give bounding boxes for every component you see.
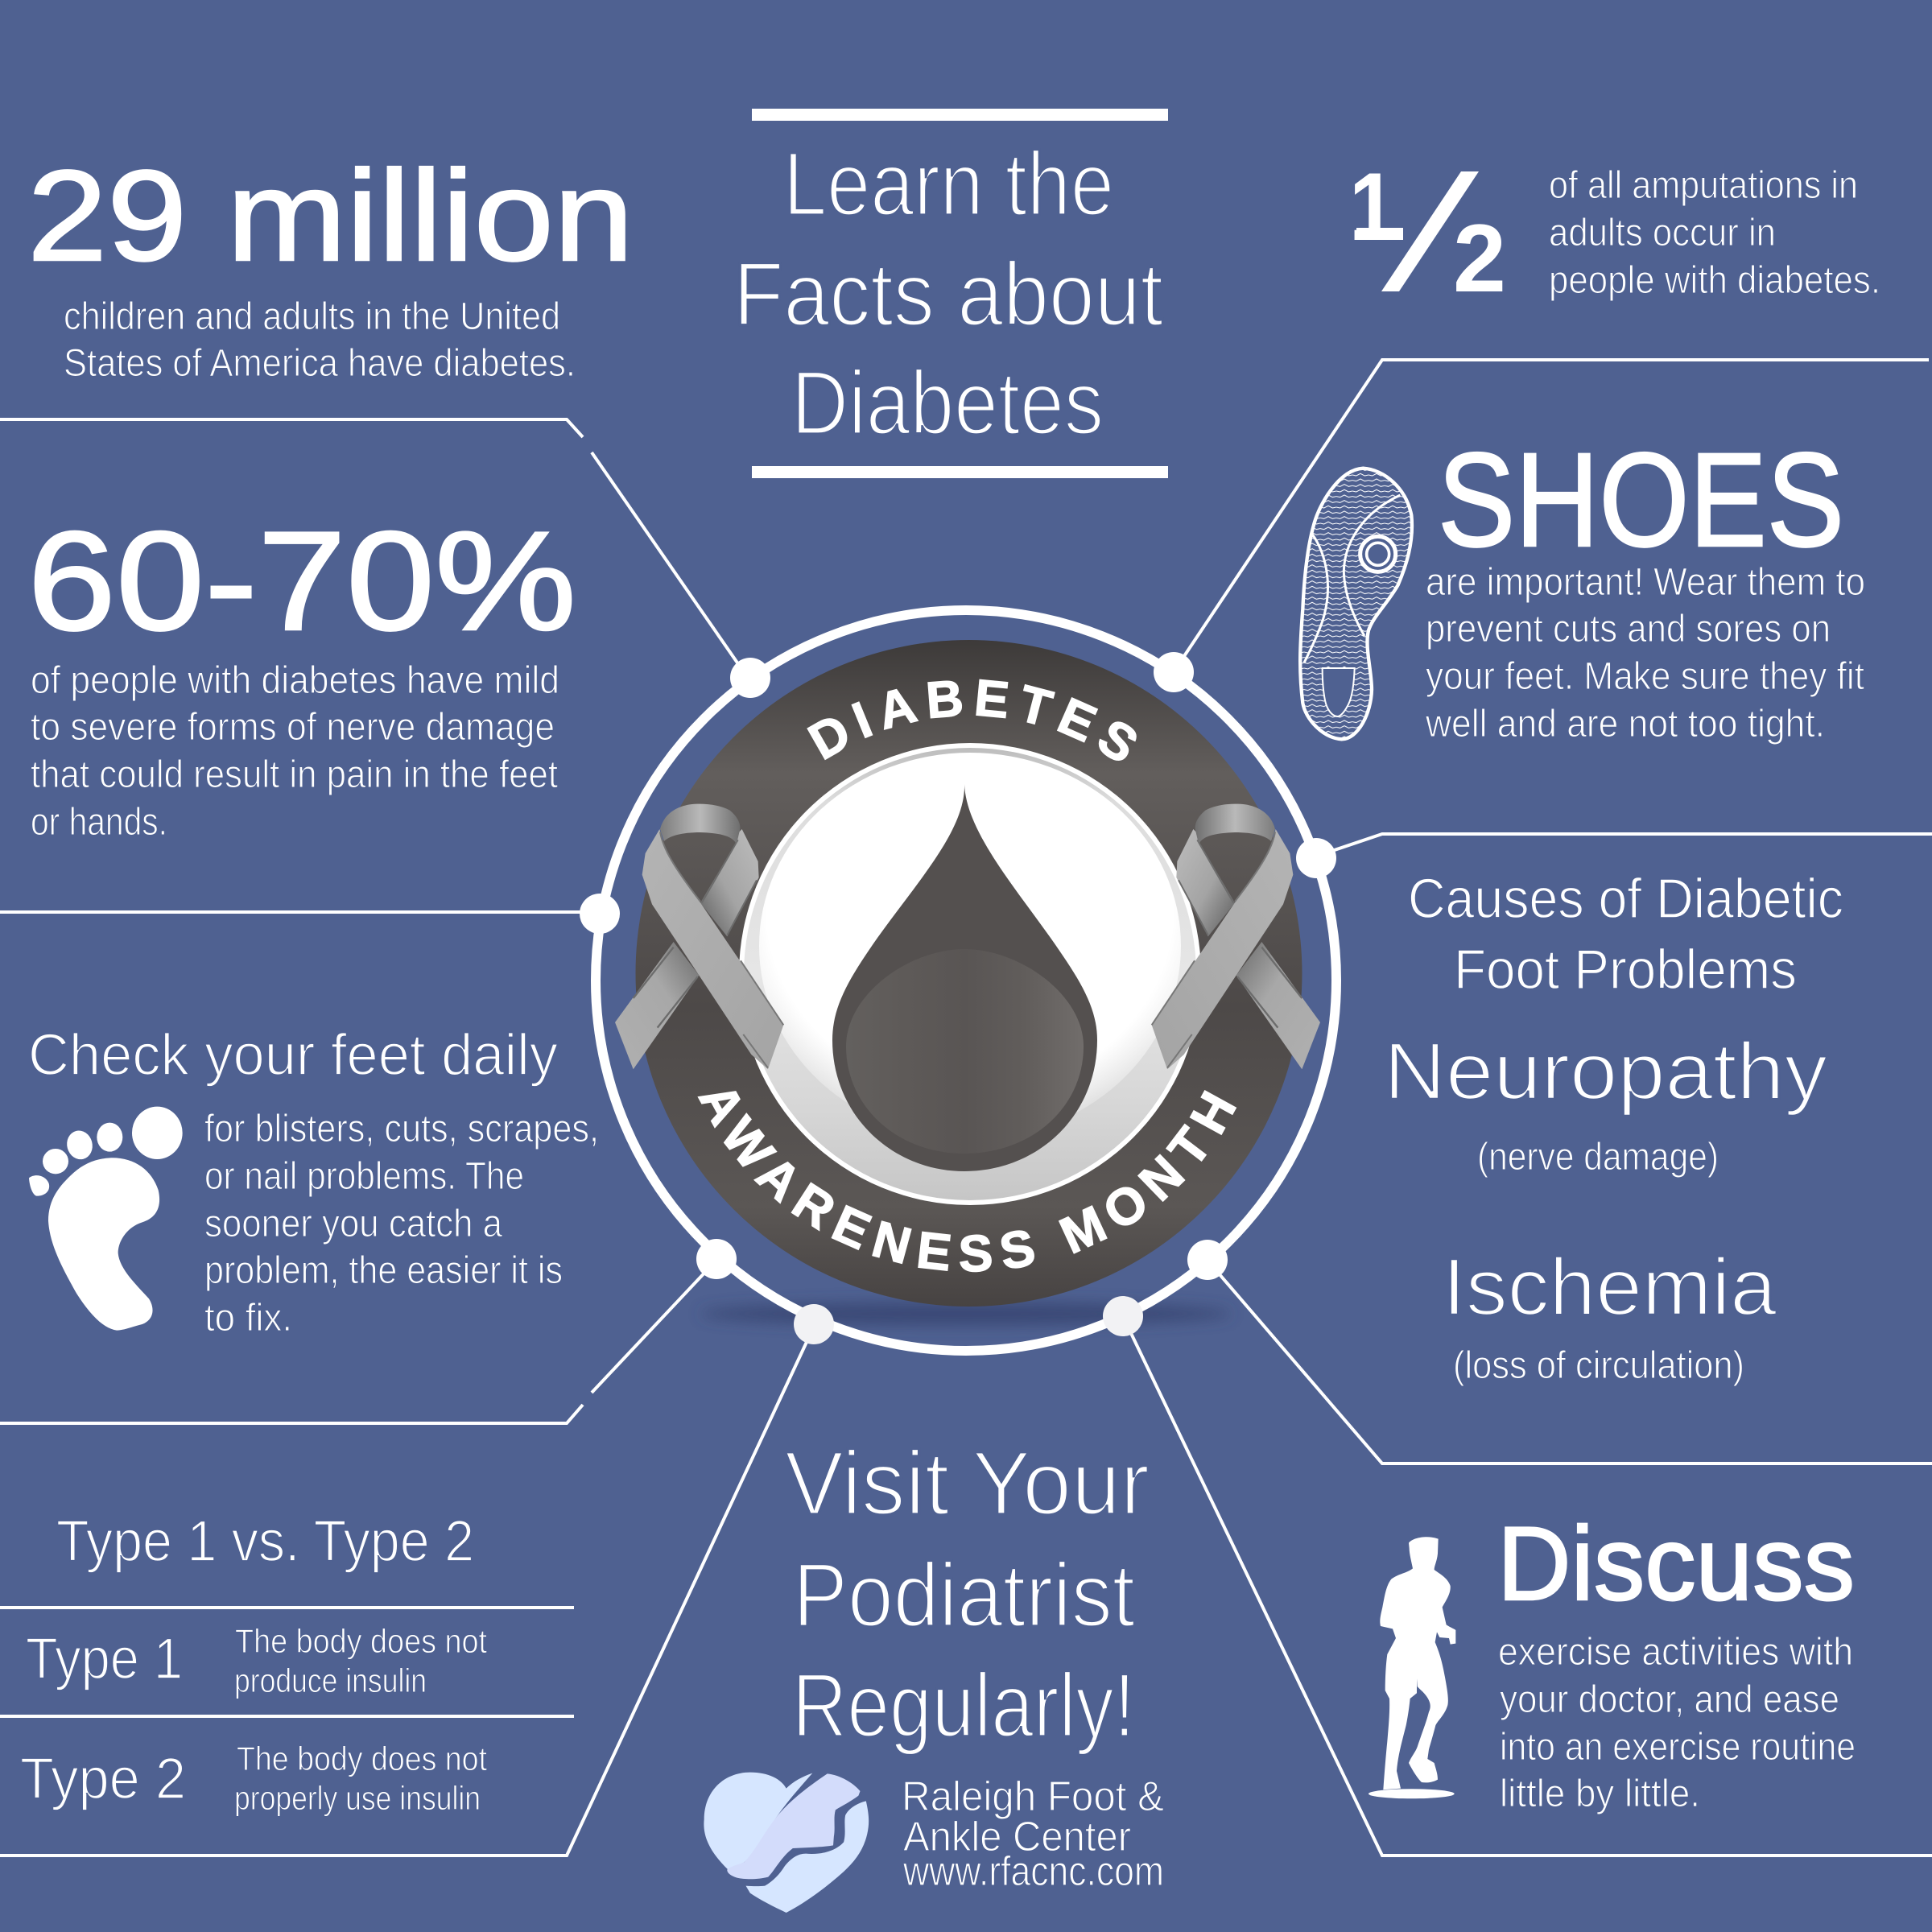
panel: title: [733, 109, 1168, 478]
panel: 29 million: [27, 143, 634, 385]
icon: blood drop: [832, 784, 1097, 1171]
panel: 60-70%: 60-70%: [27, 503, 576, 660]
panel: type 1 vs type 2: The body does not: [237, 1740, 487, 1777]
icon: shoe sole: [1296, 464, 1417, 743]
ring with connector dots: [580, 610, 1336, 1351]
icon: footprint: [29, 1107, 183, 1331]
panel: visit your podiatrist: Visit Your: [785, 1433, 1150, 1534]
description: States of America have diabetes.: [64, 342, 576, 385]
panel: discuss: Discuss: [1497, 1505, 1855, 1622]
panel: causes of diabetic foot problems: Neuropathy: [1384, 1026, 1827, 1117]
curved text: awareness month: AWARENESS MONTH: [697, 1090, 1236, 1272]
logo text: www.rfacnc.com: [902, 1848, 1164, 1895]
fraction one half: 2: [1453, 204, 1506, 312]
panel: visit your podiatrist: [785, 1433, 1150, 1756]
connector lines: [0, 360, 1932, 1856]
panel: check your feet: [28, 1023, 599, 1340]
inner sphere: [739, 743, 1201, 1205]
panel: 29 million: 29 million: [27, 143, 634, 287]
description: problem, the easier it is: [204, 1249, 563, 1292]
description: for blisters, cuts, scrapes,: [204, 1108, 599, 1150]
description: prevent cuts and sores on: [1426, 608, 1831, 650]
description: [31, 659, 559, 844]
description: [204, 1108, 599, 1340]
description: [1425, 561, 1865, 745]
description: your feet. Make sure they fit: [1426, 655, 1864, 698]
title text: [733, 134, 1163, 453]
panel: causes of diabetic foot problems: (loss of circulation): [1453, 1344, 1744, 1387]
panel: causes of diabetic foot problems: (nerve damage): [1477, 1136, 1719, 1179]
description: that could result in pain in the feet: [31, 753, 558, 796]
panel: 60-70%: [27, 503, 576, 844]
title text: Learn the: [783, 134, 1114, 234]
description: into an exercise routine: [1500, 1726, 1856, 1769]
logo: heart with foot: [704, 1773, 869, 1913]
panel: type 1 vs type 2: Type 2: [20, 1747, 186, 1811]
panel: causes of diabetic foot problems: Ischemia: [1443, 1242, 1777, 1332]
logo text: Ankle Center: [903, 1814, 1131, 1860]
description: or hands.: [31, 801, 167, 844]
description: [64, 295, 576, 385]
description: [1549, 164, 1880, 302]
panel: type 1 vs type 2: Type 1: [26, 1627, 183, 1691]
fraction one half: 1: [1349, 153, 1396, 261]
panel: type 1 vs type 2: produce insulin: [234, 1662, 427, 1699]
panel: check your feet: Check your feet daily: [28, 1023, 558, 1088]
panel: type 1 vs type 2: The body does not: [235, 1622, 487, 1660]
description: your doctor, and ease: [1500, 1678, 1839, 1721]
icon: runner: [1368, 1537, 1455, 1798]
fraction one half: [1349, 153, 1506, 312]
description: well and are not too tight.: [1425, 703, 1825, 745]
panel: visit your podiatrist: Podiatrist: [793, 1545, 1135, 1645]
panel: one half: [1349, 153, 1880, 312]
description: people with diabetes.: [1549, 259, 1880, 302]
panel: shoes: [1296, 426, 1865, 745]
description: children and adults in the United: [64, 295, 560, 338]
ribbon left: [615, 804, 783, 1069]
description: of all amputations in: [1549, 164, 1858, 207]
description: adults occur in: [1549, 212, 1776, 254]
description: [1498, 1631, 1856, 1815]
description: little by little.: [1500, 1773, 1700, 1815]
panel: causes of diabetic foot problems: [1384, 867, 1843, 1387]
badge: diabetes awareness month: [615, 640, 1320, 1307]
panel: causes of diabetic foot problems: Foot Problems: [1454, 938, 1797, 1001]
panel: type 1 vs type 2: [20, 1509, 487, 1817]
description: sooner you catch a: [204, 1203, 502, 1245]
description: exercise activities with: [1498, 1631, 1853, 1674]
description: are important! Wear them to: [1426, 561, 1865, 604]
panel: type 1 vs type 2: Type 1 vs. Type 2: [56, 1509, 474, 1574]
title text: Diabetes: [791, 353, 1104, 453]
title text: Facts about: [733, 244, 1163, 345]
ribbon right: [1152, 804, 1320, 1069]
panel: discuss: [1368, 1505, 1856, 1815]
logo text: [902, 1773, 1164, 1895]
description: to severe forms of nerve damage: [31, 706, 555, 749]
panel: causes of diabetic foot problems: Causes of Diabetic: [1408, 867, 1843, 930]
panel: type 1 vs type 2: properly use insulin: [234, 1779, 481, 1817]
curved text: diabetes: DIABETES: [807, 679, 1137, 761]
description: or nail problems. The: [204, 1155, 524, 1198]
description: to fix.: [204, 1297, 292, 1340]
description: of people with diabetes have mild: [31, 659, 559, 702]
panel: shoes: SHOES: [1438, 426, 1844, 575]
badge shadow: [700, 1302, 1232, 1325]
logo text: Raleigh Foot &: [902, 1773, 1164, 1820]
panel: visit your podiatrist: Regularly!: [792, 1655, 1135, 1756]
